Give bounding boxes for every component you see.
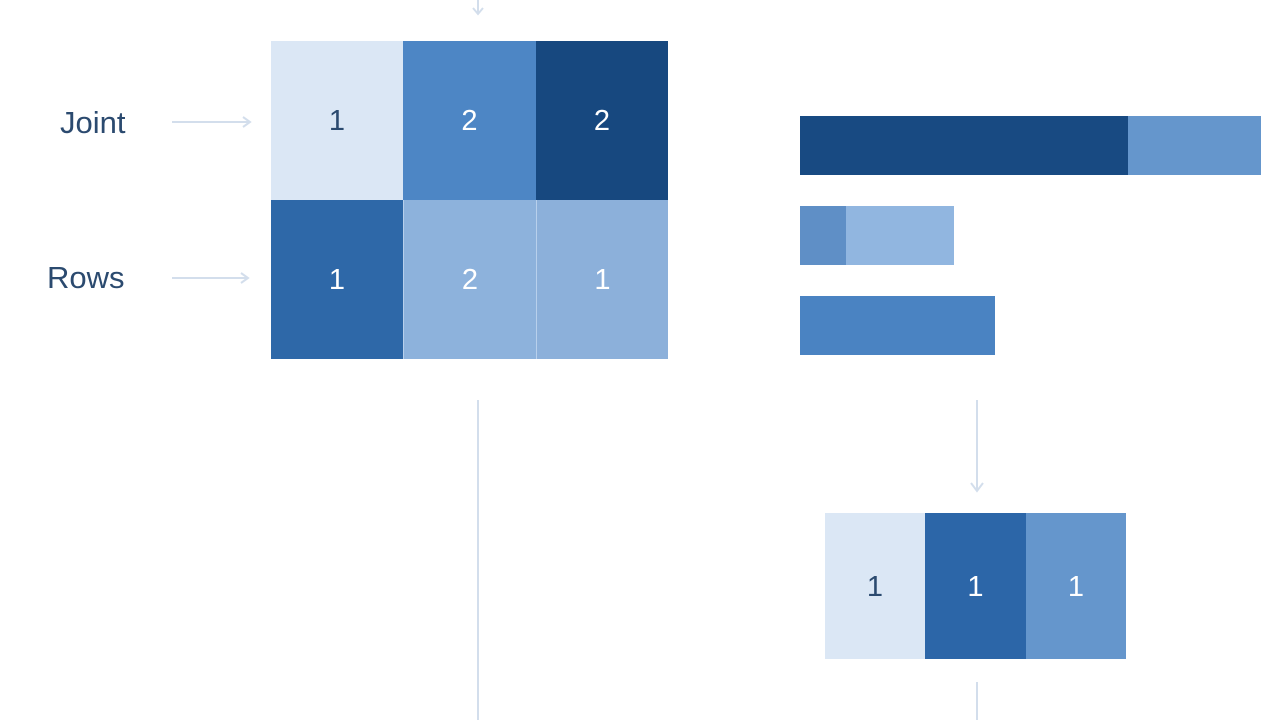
grid matrix <box>271 41 668 359</box>
result row: 1 <box>867 570 883 602</box>
bar chart <box>800 116 1261 355</box>
label: Joint: Joint <box>60 105 125 140</box>
label: Rows: Rows <box>47 260 125 295</box>
grid matrix: 2 <box>594 105 610 137</box>
grid matrix: 1 <box>329 264 345 296</box>
result row: 1 <box>1068 570 1084 602</box>
grid matrix: 2 <box>461 105 478 137</box>
grid matrix: 2 <box>462 264 478 296</box>
result row: 1 <box>967 570 984 602</box>
grid matrix: 1 <box>329 105 345 137</box>
result row <box>825 513 1126 659</box>
grid matrix: 1 <box>594 264 611 296</box>
